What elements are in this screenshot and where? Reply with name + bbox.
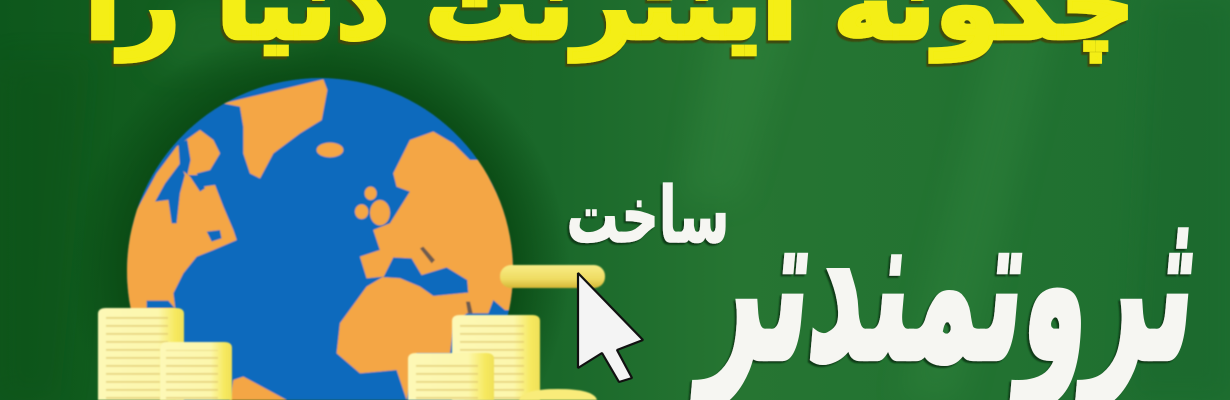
coin stack: left front	[160, 342, 232, 400]
Gulf of Mexico	[147, 301, 175, 308]
Ireland	[355, 204, 368, 219]
South America	[230, 377, 287, 400]
continent: Greenland	[223, 79, 327, 178]
coin stack: right front	[408, 353, 494, 400]
coin: bottom right	[519, 389, 597, 400]
coin: falling	[500, 265, 605, 288]
subtitle: sakht: ساخت	[566, 170, 730, 261]
Mediterranean Sea	[383, 257, 468, 296]
Hudson Bay	[155, 163, 185, 223]
United Kingdom	[370, 200, 390, 225]
Scotland	[365, 187, 377, 200]
continent: North America	[120, 130, 237, 320]
Arctic channel	[178, 140, 205, 192]
globe	[120, 78, 520, 400]
continent: Eurasia and Africa	[337, 132, 520, 400]
coin stack: right back	[452, 315, 540, 400]
Red Sea	[466, 302, 473, 313]
Iceland	[317, 143, 343, 157]
icon: mouse cursor	[578, 273, 643, 382]
Great Lakes	[207, 230, 222, 242]
coin stack: left back	[98, 308, 184, 400]
Black Sea	[420, 247, 435, 263]
